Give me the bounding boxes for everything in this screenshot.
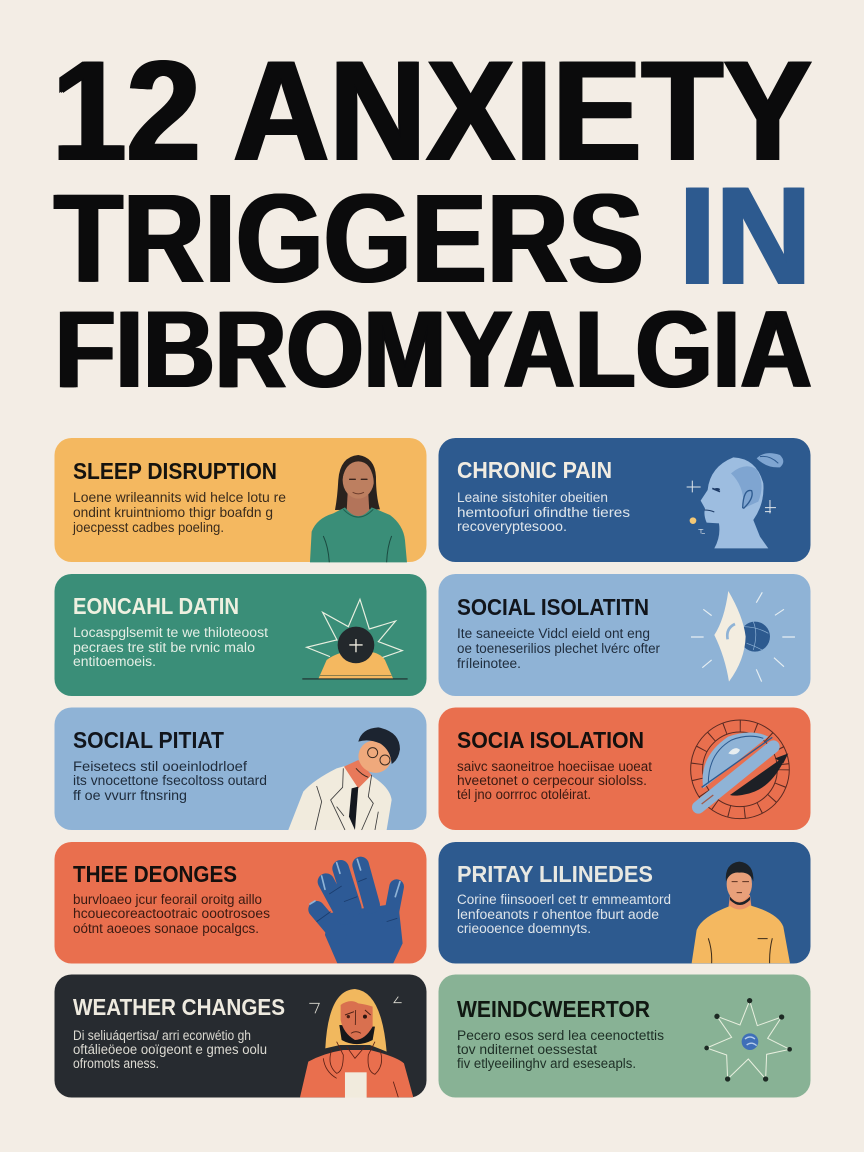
text block: thee deonges: oótnt aoeoes sonaoe pocalgcs. <box>73 921 259 936</box>
title <box>52 32 812 411</box>
icon: distressed woman <box>300 989 413 1098</box>
text block: social pitiat: Feisetecs stil ooeinlodrloef <box>73 759 247 774</box>
text block: sleep disruption: joecpesst cadbes poeling. <box>72 520 224 535</box>
icon: woman in green sweater <box>310 455 407 562</box>
title: TRIGGERS <box>54 168 644 309</box>
text block: social pitiat: its vnocettone fsecoltoss outard <box>73 773 267 788</box>
heading: eoncahl datin: EONCAHL DATIN <box>73 593 239 619</box>
icon: protractor dial with blade <box>691 720 789 819</box>
title: 12 ANXIETY <box>52 32 812 191</box>
heading: social pitiat: SOCIAL PITIAT <box>73 727 225 753</box>
text block: socia isolation: tél jno oorrroc otoléirat. <box>457 787 591 802</box>
heading: sleep disruption: SLEEP DISRUPTION <box>73 458 277 484</box>
text block: socia isolation: saivc saoneitroe hoeciisae uoeat <box>457 759 652 774</box>
panel: pritay lilinedes <box>438 842 810 964</box>
text block: weather changes <box>73 1028 267 1071</box>
text block: social isolatitn <box>457 626 660 671</box>
heading: thee deonges: THEE DEONGES <box>73 861 237 887</box>
text block: pritay lilinedes <box>457 892 671 936</box>
text block: thee deonges: burvloaeo jcur feorail oroitg aillo <box>73 892 262 907</box>
heading: weather changes: WEATHER CHANGES <box>73 994 285 1020</box>
text block: socia isolation <box>457 759 652 802</box>
panel: chronic pain <box>438 438 810 562</box>
text block: social isolatitn: Ite saneeicte Vidcl eield ont eng <box>457 626 650 641</box>
icon: starburst with dark circle <box>302 599 408 679</box>
text block: socia isolation: hveetonet o cerpecour siololss. <box>457 773 647 788</box>
icon: doctor in white coat <box>288 727 400 830</box>
title: FIBROMYALGIA <box>54 289 811 411</box>
panel: social pitiat <box>54 708 426 830</box>
title: IN <box>679 156 811 314</box>
text block: weindcweertor <box>457 1028 664 1071</box>
text block: chronic pain: recoveryptesooo. <box>457 519 567 534</box>
text block: eoncahl datin: entitoemoeis. <box>73 654 156 669</box>
panel: social isolatitn <box>438 574 810 696</box>
text block: weindcweertor: Pecero esos serd lea ceenoctettis <box>457 1028 664 1043</box>
panel: sleep disruption <box>54 438 426 562</box>
text block: eoncahl datin <box>73 625 268 669</box>
text block: thee deonges <box>73 892 270 936</box>
icon: crescent and globe <box>691 591 795 682</box>
text block: weather changes: Di seliuáqertisa/ arri ecorwétio gh <box>73 1028 251 1043</box>
text block: weindcweertor: fiv etlyeeilinghv ard eseseapls. <box>457 1056 636 1071</box>
text block: chronic pain: Leaine sistohiter obeitien <box>457 490 608 505</box>
icon: blue hand <box>310 859 403 963</box>
text block: chronic pain: hemtoofuri ofindthe tieres <box>457 505 630 520</box>
text block: social pitiat: ff oe vvurr ftnsring <box>73 788 187 803</box>
text block: pritay lilinedes: Corine fiinsooerl cet tr emmeamtord <box>457 892 671 907</box>
panel: weather changes <box>54 974 426 1098</box>
text block: eoncahl datin: pecraes tre stit be rvnic malo <box>73 640 255 655</box>
text block: chronic pain <box>457 490 630 534</box>
text block: social pitiat <box>73 759 267 803</box>
text block: pritay lilinedes: lenfoeanots r ohentoe fburt aode <box>457 907 659 922</box>
text block: sleep disruption <box>72 490 286 535</box>
icon: head profile with sparkles <box>687 453 783 548</box>
icon: man in yellow sweater <box>692 862 790 963</box>
panel: socia isolation <box>438 708 810 830</box>
heading: socia isolation: SOCIA ISOLATION <box>457 727 644 753</box>
heading: social isolatitn: SOCIAL ISOLATITN <box>457 594 649 620</box>
heading: chronic pain: CHRONIC PAIN <box>457 457 612 483</box>
text block: weather changes: ofromots aness. <box>73 1056 159 1071</box>
text block: sleep disruption: ondint kruintniomo thigr boafdn g <box>73 505 273 520</box>
text block: weindcweertor: tov nditernet oessestat <box>457 1042 597 1057</box>
text block: pritay lilinedes: crieooence doemnyts. <box>457 921 591 936</box>
icon: seven-point star with dots <box>704 998 792 1082</box>
panel: weindcweertor <box>438 974 810 1098</box>
heading: weindcweertor: WEINDCWEERTOR <box>457 996 650 1022</box>
text block: weather changes: oftálieöeoe ooïgeont e gmes oolu <box>73 1042 267 1057</box>
panel: eoncahl datin <box>54 574 426 696</box>
text block: social isolatitn: oe toeneserilios plechet lvérc ofter <box>457 641 660 656</box>
text block: eoncahl datin: Locaspglsemit te we thiloteoost <box>73 625 268 640</box>
text block: thee deonges: hcouecoreactootraic oootrosoes <box>73 906 270 921</box>
panel: thee deonges <box>54 842 426 964</box>
heading: pritay lilinedes: PRITAY LILINEDES <box>457 861 653 887</box>
text block: social isolatitn: fríleinotee. <box>457 656 521 671</box>
text block: sleep disruption: Loene wrileannits wid helce lotu re <box>73 490 286 505</box>
